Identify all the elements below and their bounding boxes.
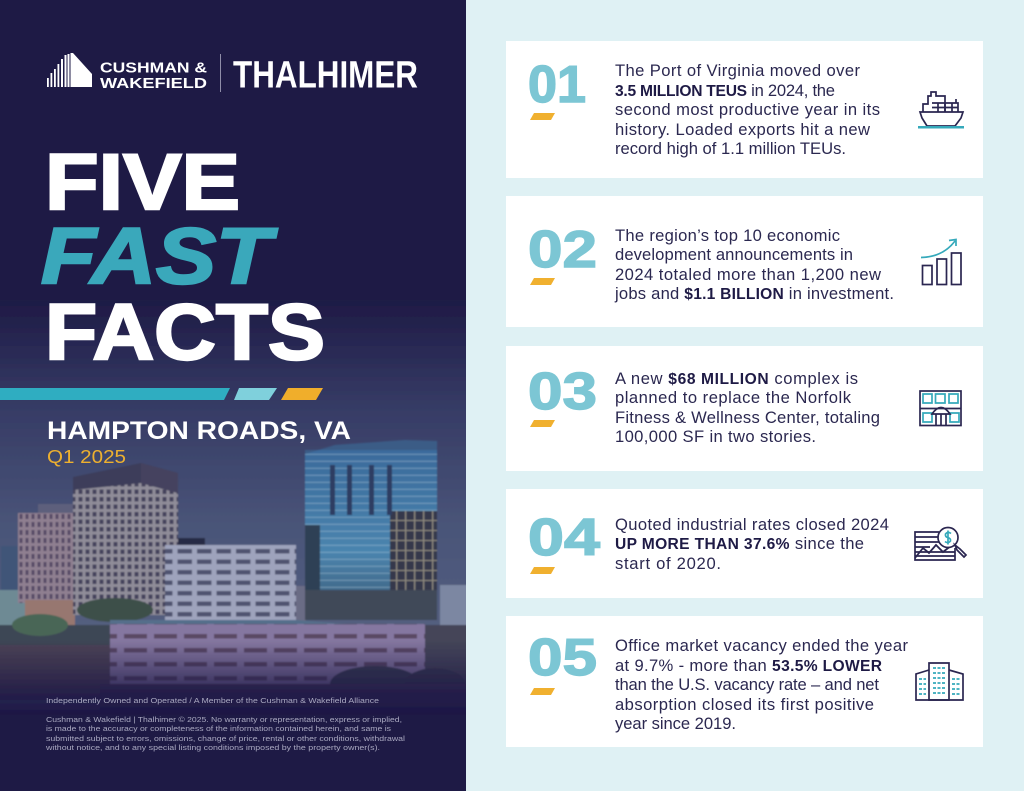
accent dash <box>530 688 555 695</box>
accent dash <box>530 113 555 120</box>
fact text: UP MORE THAN 37.6% since the <box>615 534 864 553</box>
location heading: HAMPTON ROADS, VA <box>47 417 351 445</box>
fact text: Office market vacancy ended the year <box>615 636 908 655</box>
disclaimer: Cushman & Wakefield | Thalhimer © 2025. No warranty or representation, express or implied, <box>46 715 402 724</box>
fact text: jobs and $1.1 BILLION in investment. <box>614 284 894 303</box>
disclaimer: is made to the accuracy or completeness of the information contained herein, and same is <box>46 724 391 733</box>
panel: left cover <box>0 0 476 791</box>
fact text: 100,000 SF in two stories. <box>615 427 816 446</box>
fact text: development announcements in <box>615 245 853 264</box>
fact text: second most productive year in its <box>615 100 880 119</box>
icon: fitness complex <box>920 391 961 426</box>
panel: fact 2 <box>506 196 983 327</box>
fact text <box>614 226 894 303</box>
logo wordmark: THALHIMER <box>233 54 418 96</box>
fact text <box>615 636 908 733</box>
accent dash <box>530 278 555 285</box>
number 01: 01 <box>528 56 586 114</box>
fact text: than the U.S. vacancy rate – and net <box>615 675 879 694</box>
fact text: The Port of Virginia moved over <box>615 61 860 80</box>
icon: container ship <box>918 92 964 128</box>
fact text <box>615 515 889 573</box>
fact text: Quoted industrial rates closed 2024 <box>615 515 889 534</box>
disclaimer: without notice, and to any special listing conditions imposed by the property owner(s). <box>45 743 380 752</box>
icon: office buildings <box>916 663 963 700</box>
date: Q1 2025 <box>47 446 126 467</box>
skyline photo <box>0 330 466 688</box>
number 05: 05 <box>528 629 597 687</box>
fact text: Fitness & Wellness Center, totaling <box>615 408 880 427</box>
panel: fact 3 <box>506 346 983 471</box>
fact text: The region’s top 10 economic <box>615 226 840 245</box>
fact text: at 9.7% - more than 53.5% LOWER <box>615 656 882 675</box>
icon: rising bar chart <box>921 240 961 284</box>
alliance line: Independently Owned and Operated / A Member of the Cushman & Wakefield Alliance <box>46 696 379 705</box>
fact text <box>615 369 880 446</box>
stripes <box>0 388 323 400</box>
panel: fact 1 <box>506 41 983 178</box>
fact text: absorption closed its first positive <box>615 695 874 714</box>
fact text: history. Loaded exports hit a new <box>615 120 871 139</box>
title: Five Fast Facts: FAST <box>41 211 278 300</box>
fact text: 2024 totaled more than 1,200 new <box>615 265 882 284</box>
fact text: 3.5 MILLION TEUS in 2024, the <box>615 81 835 100</box>
title: Five Fast Facts: FIVE <box>45 137 240 226</box>
number 04: 04 <box>528 509 600 567</box>
icon: market magnifier <box>915 528 966 560</box>
panel: fact 5 <box>506 616 983 747</box>
logo wordmark <box>100 54 418 92</box>
logo wordmark: CUSHMAN & <box>100 60 208 76</box>
number 03: 03 <box>528 363 597 421</box>
logo wordmark: WAKEFIELD <box>100 76 207 92</box>
title: Five Fast Facts: FACTS <box>45 287 325 376</box>
accent dash <box>530 420 555 427</box>
panel: fact 4 <box>506 489 983 598</box>
fact text: start of 2020. <box>615 554 721 573</box>
fact text: planned to replace the Norfolk <box>615 388 852 407</box>
fact text: A new $68 MILLION complex is <box>615 369 858 388</box>
disclaimer <box>45 715 405 752</box>
accent dash <box>530 567 555 574</box>
number 02: 02 <box>528 221 597 279</box>
fact text: record high of 1.1 million TEUs. <box>615 139 846 158</box>
disclaimer: submitted subject to errors, omissions, change of price, rental or other conditions, withdrawal <box>46 734 405 743</box>
title: Five Fast Facts <box>41 153 323 362</box>
fact text: year since 2019. <box>615 714 736 733</box>
icon: C&W building mark <box>47 53 92 87</box>
logo: Cushman & Wakefield | Thalhimer <box>47 53 418 92</box>
fact text <box>615 61 880 158</box>
